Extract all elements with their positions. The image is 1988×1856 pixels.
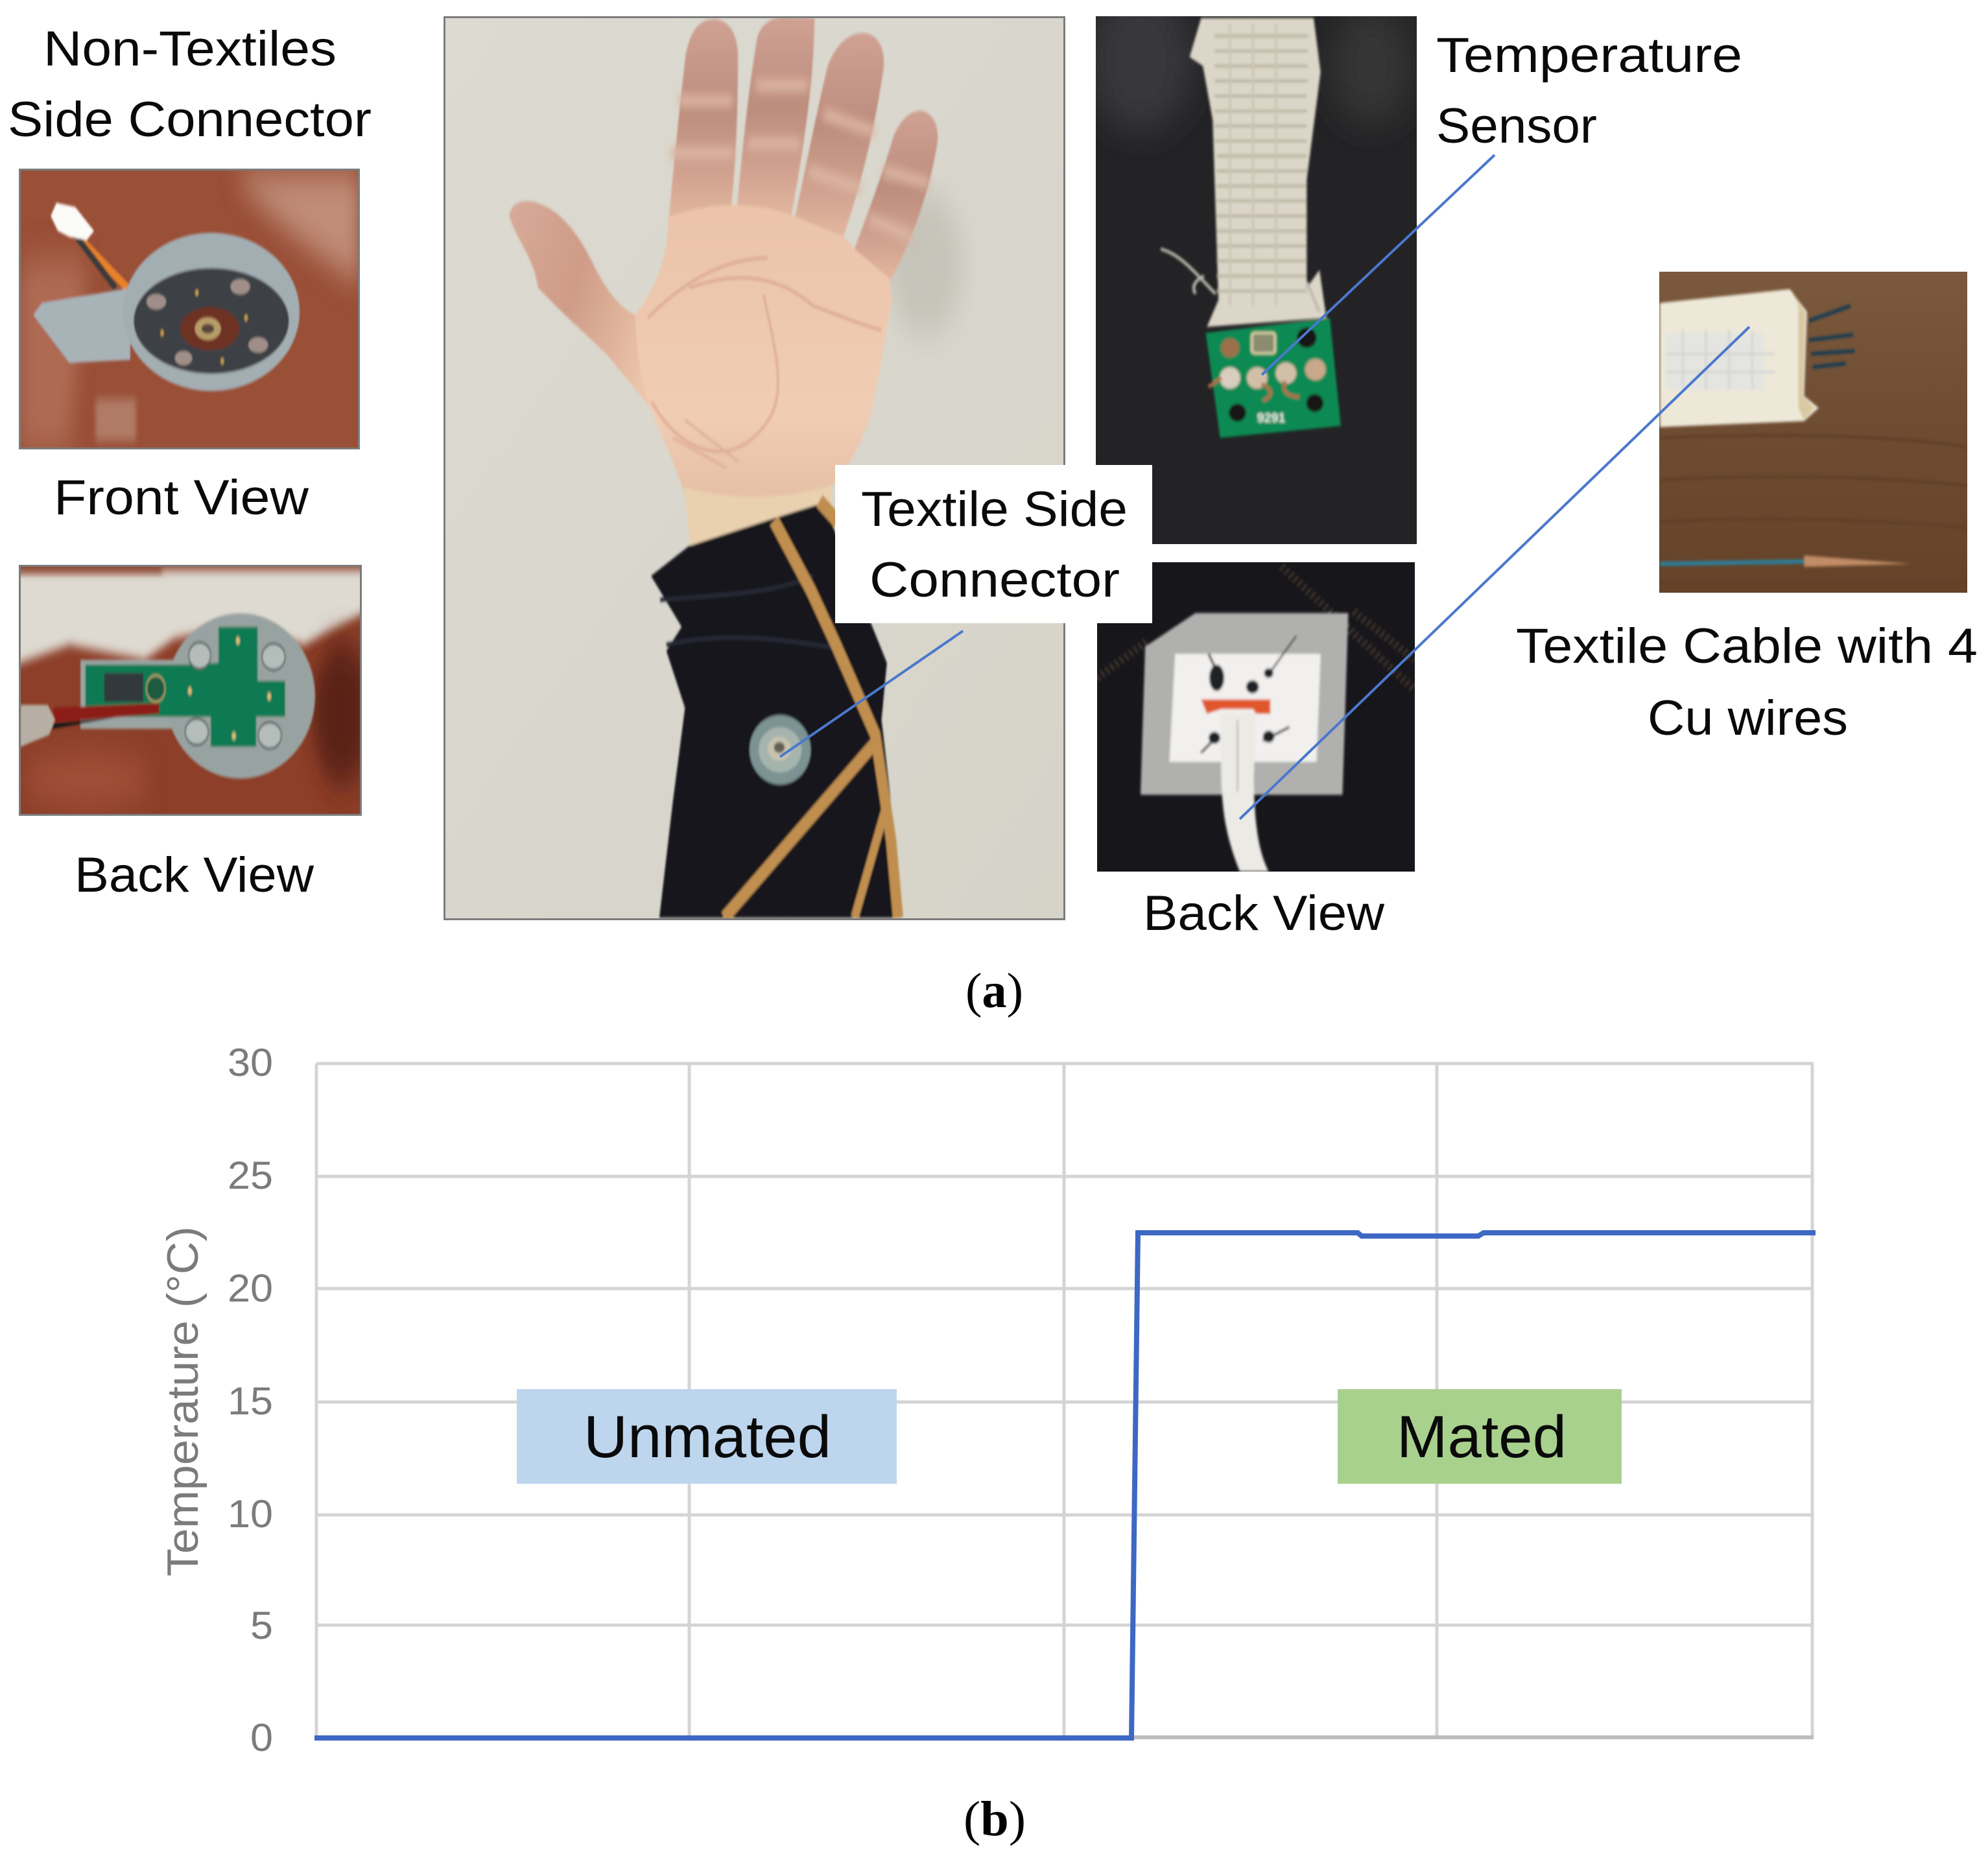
y axis tick labels: 15 bbox=[228, 1379, 273, 1423]
photo: connector front view bbox=[19, 169, 360, 450]
y axis tick labels: 20 bbox=[228, 1267, 273, 1310]
photo: temperature sensor on textile ribbon: 9291 bbox=[1257, 411, 1285, 425]
caption: panel b: (b) bbox=[964, 1792, 1026, 1846]
leader line: temperature sensor bbox=[1262, 155, 1495, 375]
y axis tick labels: 25 bbox=[228, 1154, 273, 1197]
heading: non-textiles side connector: Non-Textiles bbox=[43, 21, 337, 77]
gold stripes bbox=[774, 501, 898, 918]
chart: temperature over time bbox=[158, 1041, 1816, 1759]
fingers bbox=[669, 19, 738, 222]
label: back view: Back View bbox=[75, 848, 314, 903]
label: textile cable with 4 Cu wires bbox=[1516, 619, 1978, 746]
shadow beside hand bbox=[888, 192, 962, 336]
connector on sleeve bbox=[750, 715, 811, 785]
data line bbox=[314, 1233, 1816, 1738]
caption: panel a: (a) bbox=[965, 964, 1023, 1018]
callout: textile side connector: Textile Side bbox=[861, 482, 1128, 537]
photo: textile cable with copper wires bbox=[1659, 272, 1967, 593]
heading: non-textiles side connector: Side Connector bbox=[8, 92, 372, 147]
callout: textile side connector bbox=[780, 465, 1152, 757]
y axis tick labels: 5 bbox=[250, 1604, 273, 1647]
soft finger creases bbox=[670, 85, 929, 237]
y axis tick labels: 0 bbox=[250, 1716, 273, 1759]
label: temperature sensor: Temperature bbox=[1436, 28, 1742, 83]
label: unmated bbox=[517, 1389, 897, 1484]
photo: textile patch back view bbox=[1097, 562, 1415, 872]
label: mated: Mated bbox=[1397, 1404, 1567, 1470]
photo: temperature sensor on textile ribbon bbox=[1089, 0, 1417, 544]
palm bbox=[635, 205, 892, 555]
grid lines bbox=[316, 1064, 1814, 1737]
y axis tick labels: 30 bbox=[228, 1041, 273, 1084]
photo: hand wearing textile sleeve bbox=[444, 16, 1065, 920]
label: unmated: Unmated bbox=[584, 1404, 831, 1470]
wrist bbox=[684, 484, 832, 555]
label: back view of textile patch: Back View bbox=[1143, 886, 1385, 941]
photo: connector back view bbox=[12, 558, 376, 816]
label: temperature sensor: Sensor bbox=[1436, 99, 1597, 154]
y axis tick labels: 10 bbox=[228, 1492, 273, 1536]
callout: textile side connector: Connector bbox=[870, 553, 1120, 608]
label: temperature sensor bbox=[1436, 28, 1742, 154]
y axis tick labels bbox=[228, 1041, 273, 1759]
y axis title: Temperature (°C) bbox=[158, 1226, 207, 1576]
sleeve bbox=[651, 503, 901, 918]
label: mated bbox=[1338, 1389, 1622, 1484]
label: textile cable with 4 Cu wires: Cu wires bbox=[1648, 691, 1848, 746]
label: front view: Front View bbox=[54, 470, 309, 525]
leader line: textile cable bbox=[1240, 327, 1749, 819]
heading: non-textiles side connector bbox=[8, 21, 372, 147]
palm creases bbox=[652, 294, 778, 451]
label: textile cable with 4 Cu wires: Textile Cable with 4 bbox=[1516, 619, 1978, 674]
thumb bbox=[509, 201, 681, 420]
